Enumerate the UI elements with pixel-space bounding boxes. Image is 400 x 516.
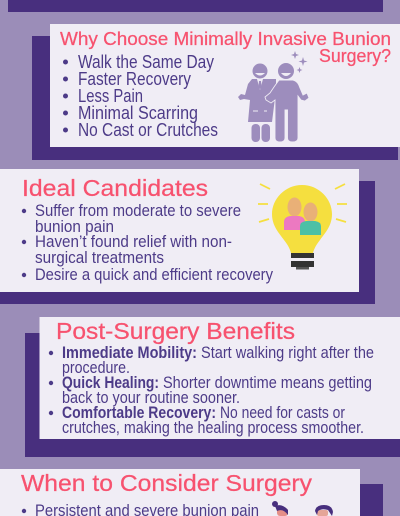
list: post-surgery benefits: back to your routine sooner. bbox=[62, 389, 240, 407]
panel: post-surgery benefits bbox=[25, 317, 400, 457]
icon: light bulb with two people bbox=[258, 184, 347, 270]
list: why choose benefits: Less Pain bbox=[78, 86, 143, 106]
panel: when to consider surgery bbox=[0, 469, 383, 516]
icon: two people heads bbox=[272, 501, 333, 516]
heading: when to consider surgery: When to Consider Surgery bbox=[21, 470, 313, 496]
list: why choose benefits: Walk the Same Day bbox=[78, 52, 214, 72]
heading: why choose: Surgery? bbox=[319, 46, 391, 66]
list: why choose benefits: Faster Recovery bbox=[78, 69, 191, 89]
panel: why choose bbox=[32, 24, 400, 160]
list: why choose benefits: No Cast or Crutches bbox=[78, 120, 218, 140]
icon: smiling doctor and patient bbox=[238, 51, 309, 142]
list: post-surgery benefits: Shorter downtime means getting bbox=[163, 374, 372, 392]
list: post-surgery benefits: Quick Healing: bbox=[62, 374, 159, 392]
list: ideal candidates bbox=[22, 202, 274, 284]
list: post-surgery benefits: Comfortable Recovery: bbox=[62, 404, 216, 422]
heading: post-surgery benefits: Post-Surgery Benefits bbox=[56, 318, 295, 344]
heading: why choose: Why Choose Minimally Invasive Bunion bbox=[60, 29, 391, 49]
list: post-surgery benefits: No need for casts or bbox=[220, 404, 345, 422]
list: ideal candidates: Suffer from moderate to severe bbox=[35, 202, 241, 220]
list: why choose benefits: Minimal Scarring bbox=[78, 103, 198, 123]
heading: ideal candidates: Ideal Candidates bbox=[22, 175, 208, 201]
list: ideal candidates: Desire a quick and efficient recovery bbox=[35, 266, 274, 284]
panel: ideal candidates bbox=[0, 169, 375, 304]
list: ideal candidates: surgical treatments bbox=[35, 249, 164, 267]
list: post-surgery benefits bbox=[49, 344, 374, 437]
list: why choose benefits bbox=[63, 52, 218, 140]
top section shadow bar bbox=[8, 0, 383, 12]
list: post-surgery benefits: procedure. bbox=[62, 359, 130, 377]
heading: why choose bbox=[60, 29, 391, 66]
list: post-surgery benefits: Start walking right after the bbox=[201, 344, 374, 362]
list: ideal candidates: bunion pain bbox=[35, 218, 114, 236]
list: post-surgery benefits: Immediate Mobility: bbox=[62, 344, 197, 362]
list: ideal candidates: Haven’t found relief with non- bbox=[35, 233, 232, 251]
